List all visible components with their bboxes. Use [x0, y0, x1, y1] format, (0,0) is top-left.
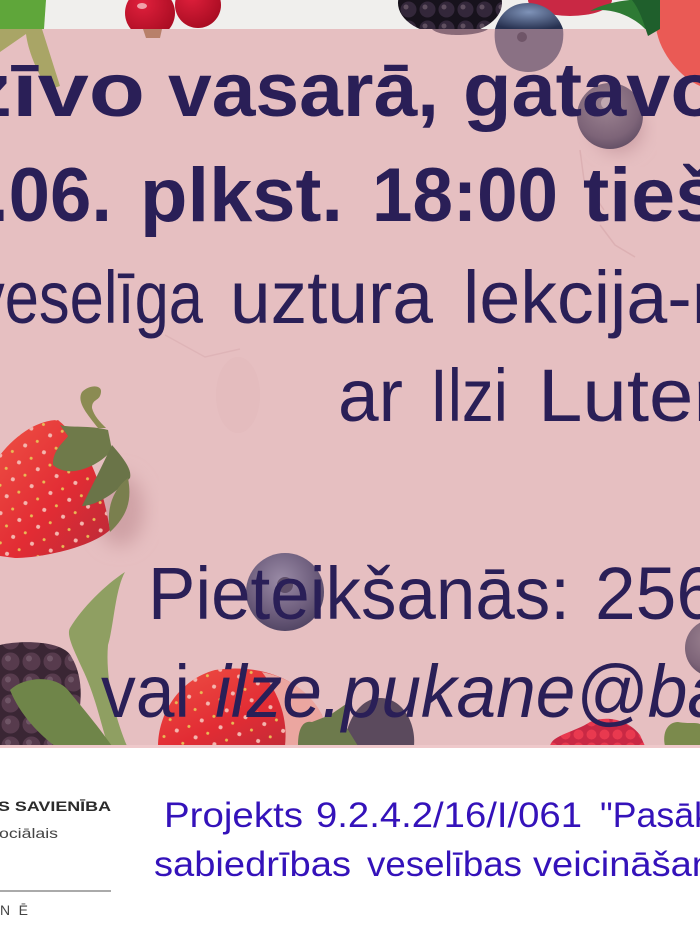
project text line 2: [154, 845, 700, 884]
project text line 2: veicināšan: [533, 845, 700, 884]
icon: mint leaf top left: [0, 0, 46, 29]
icon: blueberry centre: [246, 553, 324, 631]
heading line 1: vasarā,: [168, 48, 439, 133]
logo: organisation: N Ē: [0, 902, 28, 918]
icon: blueberry right: [577, 83, 643, 152]
heading line 1: [0, 48, 700, 133]
logo: organisation: [0, 798, 111, 918]
logo: organisation: ociālais: [0, 825, 58, 841]
heading line 2: plkst.: [140, 153, 343, 238]
icon: strawberry left: [0, 386, 144, 558]
icon: raspberry bottom: [550, 719, 645, 746]
icon: blackberry top: [398, 0, 502, 35]
heading line 2: 18:00: [372, 153, 558, 238]
icon: leaf top right: [590, 0, 655, 35]
icon: raspberry top: [528, 0, 612, 16]
logo: organisation: S SAVIENĪBA: [0, 798, 111, 814]
icon: blackberry drip: [432, 29, 488, 35]
icon: blueberry top: [495, 3, 563, 72]
icon: leaf bottom right: [664, 722, 700, 746]
icon: strawberry top right: [632, 0, 700, 86]
icon: strawberry bottom: [158, 668, 325, 746]
icon: red currants: [125, 0, 221, 38]
registration email: vai: [101, 650, 190, 733]
background texture: [165, 150, 635, 433]
top photo strip: [0, 0, 700, 38]
registration phone: Pieteikšanās:: [148, 552, 570, 635]
subheading line 2: Ilzi: [430, 354, 508, 437]
subheading line 1: [0, 256, 700, 339]
icon: currant stem: [143, 29, 162, 38]
project text line 1: [164, 796, 700, 835]
icon: faded leaf stem: [0, 29, 60, 90]
project text line 2: sabiedrības: [154, 845, 351, 884]
icon: blueberry right edge: [685, 619, 700, 677]
icon: blueberry bottom: [345, 698, 414, 746]
strawberry calyx: [53, 386, 130, 532]
subheading line 1: uztura: [230, 256, 434, 339]
subheading line 2: ar: [338, 354, 403, 437]
project text line 1: 9.2.4.2/16/I/061: [316, 796, 582, 835]
project text line 1: Projekts: [164, 796, 303, 835]
subheading line 2: [338, 354, 700, 437]
heading line 2: [0, 153, 700, 238]
icon: mint leaf tall: [69, 572, 127, 746]
icon: leaf by bottom strawberry: [298, 700, 358, 746]
panel: pink background: [0, 29, 700, 746]
pink strip under photo: [0, 745, 700, 748]
project text line 2: veselības: [367, 845, 522, 884]
icon: mint leaf small: [10, 679, 112, 746]
icon: blackberry left: [0, 642, 81, 746]
